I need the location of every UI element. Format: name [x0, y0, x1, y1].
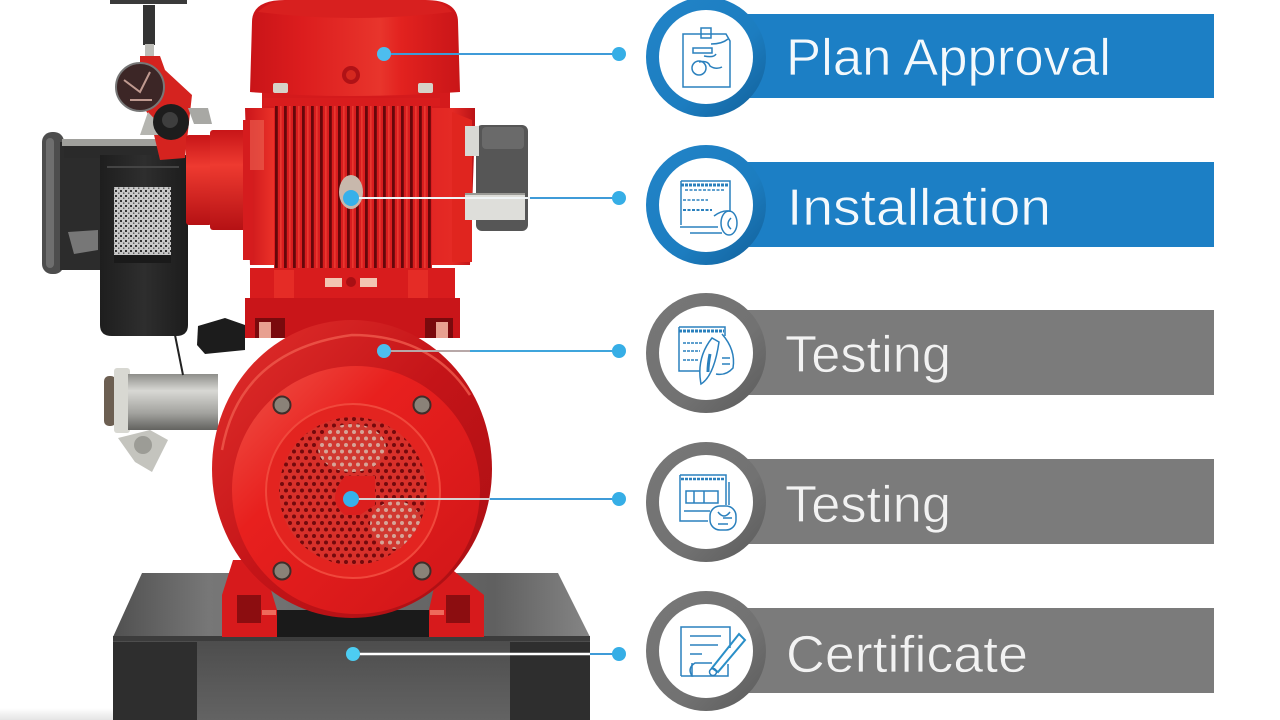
step 3 label: Testing	[785, 326, 951, 384]
step 3 badge	[646, 293, 766, 413]
callout line 1	[377, 47, 626, 61]
step 2 badge	[646, 145, 766, 265]
silver pipe and clamp	[104, 368, 218, 472]
step 5 bar	[745, 608, 1214, 693]
step 1 bar	[745, 14, 1214, 98]
step 2: Installation	[646, 145, 1214, 265]
base plinth	[113, 573, 590, 720]
fire pump illustration	[42, 0, 590, 720]
control box on left	[42, 132, 188, 336]
step 4 bar	[745, 459, 1214, 544]
step 1 badge	[646, 0, 766, 117]
callout line 2	[343, 190, 626, 206]
step 5: Certificate	[646, 591, 1214, 711]
handle, gauge and valve	[110, 0, 212, 160]
grille hub	[335, 476, 375, 515]
step 5 icon: signed certificate	[681, 627, 745, 676]
motor top cap	[250, 0, 460, 96]
callout leader lines	[343, 47, 626, 661]
perforated grille	[279, 417, 427, 565]
step 1 label: Plan Approval	[786, 29, 1111, 87]
step 3 bar	[745, 310, 1214, 395]
housing bolts	[274, 396, 430, 580]
motor side frame	[243, 90, 475, 265]
step 3: Testing	[646, 293, 1214, 413]
step 4 label: Testing	[785, 476, 951, 534]
motor cooling fins	[264, 98, 440, 270]
step 5 label: Certificate	[786, 626, 1028, 684]
nameplate oval	[339, 175, 363, 209]
step 2 icon: document scroll	[680, 181, 737, 235]
step 1 icon: clipboard plan	[683, 28, 730, 87]
step 3 icon: test report	[679, 327, 734, 384]
step 1: Plan Approval	[646, 0, 1214, 117]
red coupling	[186, 130, 248, 230]
right grey junction box	[465, 125, 528, 231]
step 2 label: Installation	[787, 179, 1051, 237]
step 2 bar	[745, 162, 1214, 247]
lower motor band	[245, 268, 460, 338]
rating plate	[114, 187, 171, 255]
step 4 badge	[646, 442, 766, 562]
step 4 icon: test sheet with gauge	[680, 475, 736, 530]
callout line 3	[377, 344, 626, 358]
floor shadow	[0, 708, 113, 720]
step 4: Testing	[646, 442, 1214, 562]
callout line 4	[343, 491, 626, 507]
cable and black plug	[175, 318, 245, 375]
callout line 5	[346, 647, 626, 661]
pump volute with grille	[212, 320, 492, 618]
step 5 badge	[646, 591, 766, 711]
pump feet	[222, 560, 484, 637]
